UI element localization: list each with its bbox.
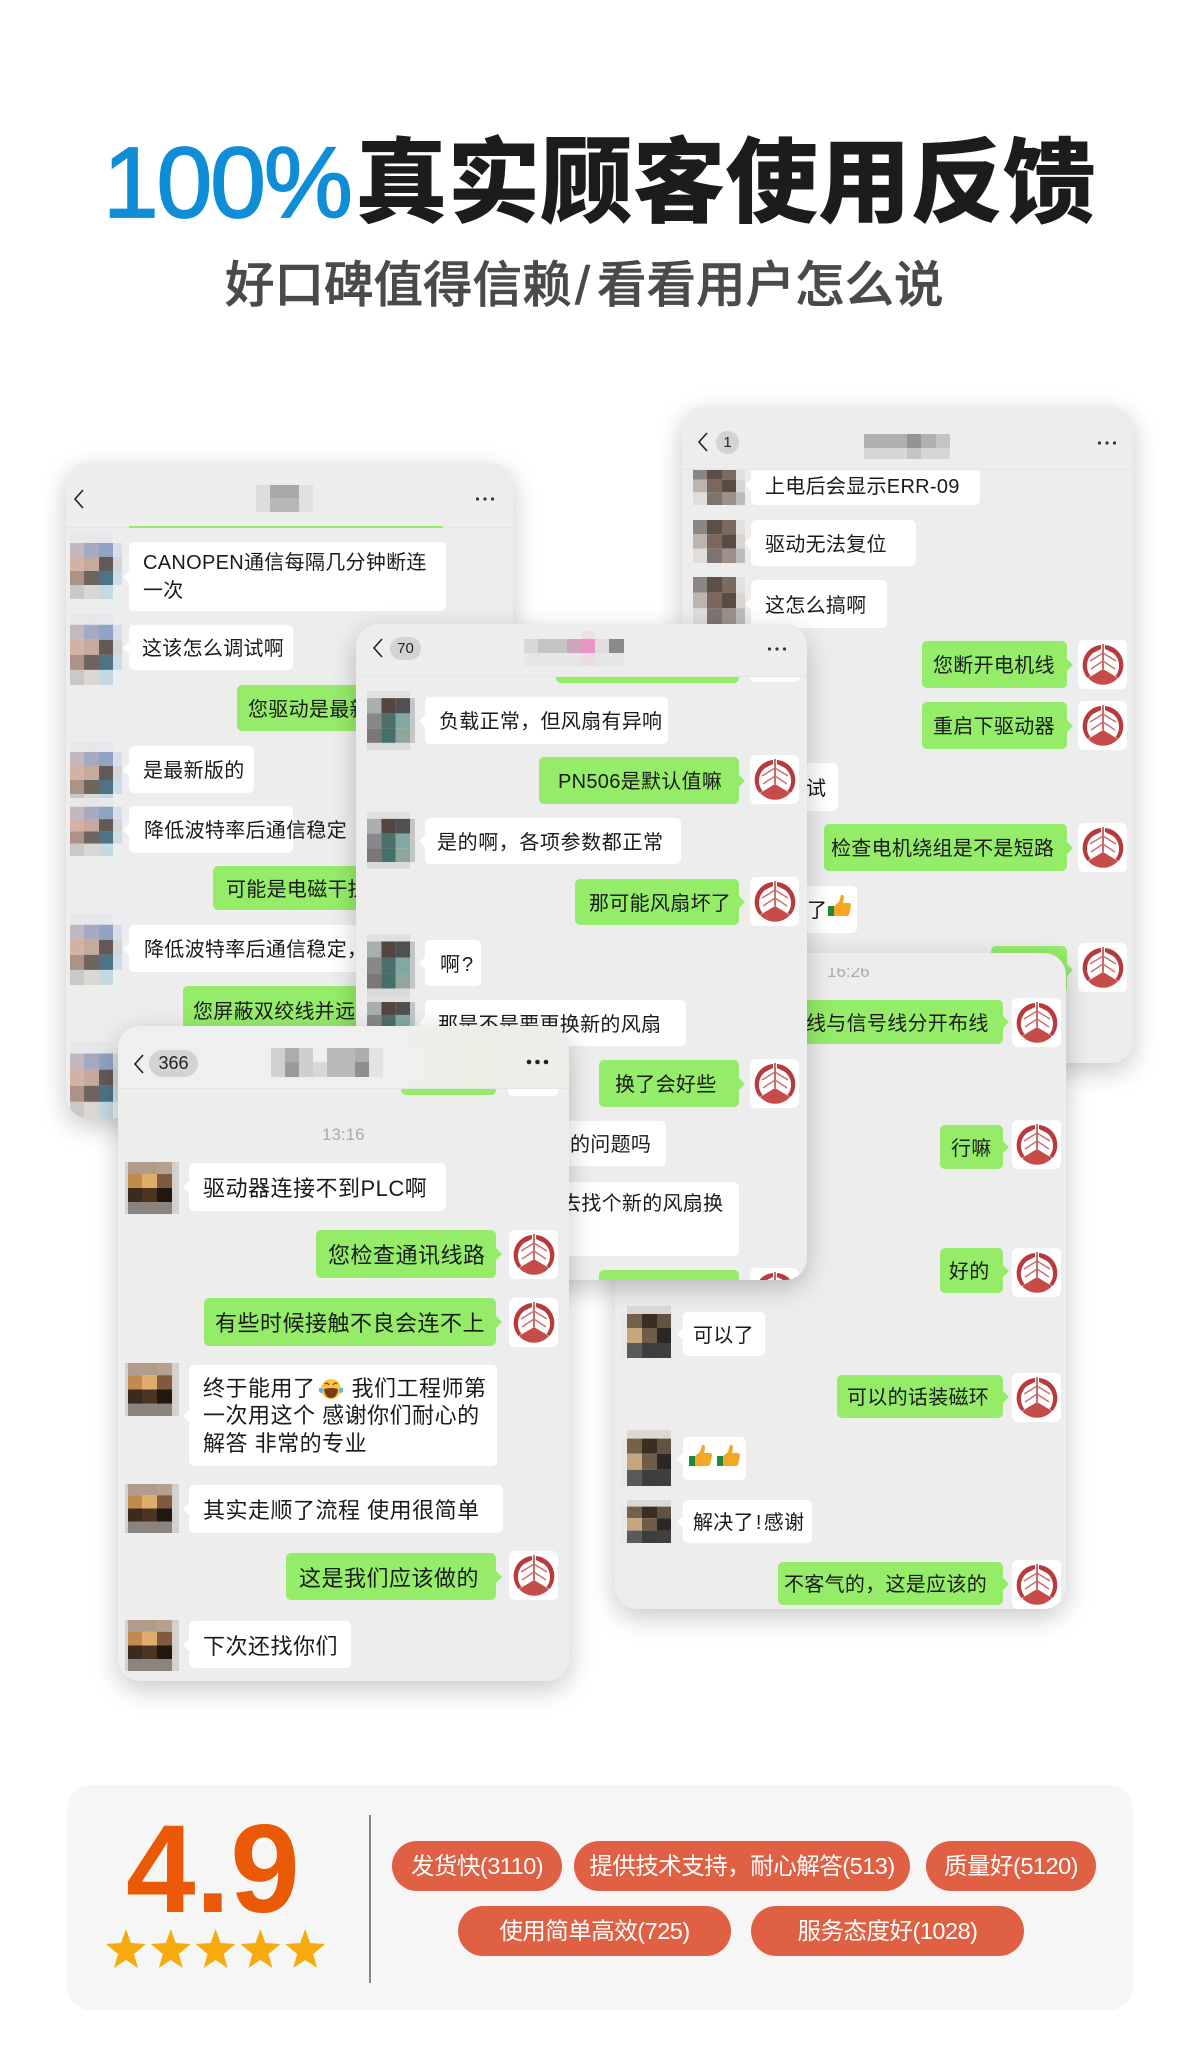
message: 这怎么搞啊: [765, 594, 866, 616]
logo avatar: [750, 755, 799, 804]
message: 降低波特率后通信稳定，: [144, 938, 367, 960]
message: multi-line thanks: 解答 非常的专业: [203, 1431, 367, 1456]
message: 是最新版的: [143, 760, 244, 782]
message: multi-line thanks: 一次用这个 感谢你们耐心的: [203, 1403, 480, 1428]
logo avatar: [509, 1230, 558, 1279]
tag pill: 提供技术支持，耐心解答(513): [589, 1853, 895, 1879]
reply: [778, 1562, 1003, 1605]
message: [129, 806, 293, 853]
reply: 可以的话装磁环: [847, 1386, 989, 1408]
message: 其实走顺了流程 使用很简单: [203, 1498, 480, 1522]
tag pill: 质量好(5120): [944, 1853, 1078, 1879]
avatar: [627, 1500, 671, 1543]
avatar: [125, 1363, 179, 1416]
panel: chat screenshot wiring: [615, 953, 1066, 1609]
reply: 您驱动是最新: [248, 698, 370, 720]
tag pill: [392, 1841, 562, 1891]
back arrow: [698, 432, 708, 452]
message: 那是不是要更换新的风扇: [438, 1014, 661, 1036]
reply: 有些时候接触不良会连不上: [215, 1310, 485, 1336]
message: multi-line thanks: 终于能用了 我们工程师第: [203, 1376, 487, 1401]
blurred name: [524, 631, 624, 666]
reply: [204, 1298, 496, 1346]
reply: 行嘛: [951, 1138, 992, 1160]
logo avatar: [1012, 1373, 1061, 1422]
back arrow: [372, 637, 384, 659]
reply: [940, 1125, 1003, 1169]
back arrow: [133, 1053, 145, 1075]
reply: 换了会好些: [615, 1074, 716, 1096]
message: [683, 1500, 812, 1543]
avatar: [693, 520, 745, 563]
avatar: [125, 1620, 179, 1671]
tag pill: [574, 1841, 910, 1891]
message: [425, 1121, 666, 1166]
reply: [760, 1000, 1003, 1044]
logo avatar: [509, 1298, 558, 1347]
subtitle: 好口碑值得信赖: [225, 258, 572, 313]
menu dots: [767, 646, 787, 652]
blurred name: [271, 1048, 418, 1077]
rating score: 4.9: [126, 1800, 300, 1939]
blurred name: [256, 485, 313, 512]
reply: [940, 1248, 1003, 1293]
menu dots: [526, 1059, 549, 1065]
panel: chat screenshot fan: [356, 624, 807, 1280]
message: [425, 1182, 739, 1256]
avatar: [125, 1484, 179, 1533]
message: 驱动器连接不到PLC啊: [203, 1176, 427, 1200]
clipped message: [750, 677, 800, 682]
tag pill: 使用简单高效(725): [499, 1918, 690, 1944]
message: [425, 940, 481, 986]
message: CANOPEN: [129, 542, 446, 611]
reply: 您检查通讯线路: [328, 1242, 486, 1268]
message: [189, 1163, 446, 1211]
avatar: [627, 1306, 671, 1358]
avatar: [70, 1054, 118, 1118]
tag pill: 服务态度好(1028): [798, 1918, 977, 1944]
reply: [183, 986, 443, 1034]
logo avatar: [1078, 943, 1127, 992]
back arrow: [74, 490, 84, 508]
reply: [286, 1553, 496, 1600]
logo avatar: [1078, 823, 1127, 872]
chat header: [356, 624, 807, 677]
logo avatar: [750, 877, 799, 926]
message: 这该怎么调试啊: [142, 638, 284, 660]
message: 去找个新的风扇换: [561, 1193, 723, 1215]
blurred name: [864, 434, 950, 459]
subtitle: 看看用户怎么说: [597, 258, 944, 313]
message: [129, 625, 293, 670]
reply: 那可能风扇坏了: [589, 892, 731, 914]
unread badge: [390, 637, 421, 660]
logo avatar: [1012, 1560, 1061, 1609]
tag pill: 发货快(3110): [411, 1853, 543, 1879]
message: [189, 1621, 351, 1668]
reply: [213, 866, 443, 910]
clipped reply: [129, 526, 443, 528]
reply: 线与信号线分开布线: [806, 1012, 989, 1034]
subtitle: [225, 256, 944, 316]
message: 驱动无法复位: [765, 534, 887, 556]
logo avatar: [509, 1551, 558, 1600]
avatar: [367, 812, 415, 869]
reply: [922, 641, 1067, 688]
avatar: [70, 624, 122, 685]
subtitle: /: [575, 256, 590, 316]
message: 解决了!感谢: [693, 1512, 804, 1534]
message: [751, 465, 980, 505]
clipped reply: [401, 1089, 496, 1095]
title accent: 100%: 100%: [103, 127, 351, 239]
avatar: [693, 577, 745, 624]
icon: thumbs up: [717, 1444, 740, 1466]
logo avatar: [1012, 1120, 1061, 1169]
message: 下次还找你们: [203, 1634, 338, 1658]
reply: PN506是默认值嘛: [558, 770, 722, 792]
avatar: [70, 924, 122, 985]
message: [425, 818, 681, 864]
avatar: [70, 543, 122, 599]
reply: 您屏蔽双绞线并远: [193, 1000, 355, 1022]
message: [425, 1000, 686, 1046]
reply: 您断开电机线: [933, 654, 1055, 676]
menu dots: [476, 497, 494, 501]
message: CANOPEN: CANOPEN通信每隔几分钟断连: [143, 552, 427, 574]
reply: 可能是电磁干扰: [226, 878, 368, 900]
logo avatar: [1012, 1248, 1061, 1297]
tag pill: [751, 1906, 1024, 1956]
message: multi-line thanks: [189, 1365, 497, 1466]
chat header: [682, 407, 1133, 470]
message: 啊?: [440, 954, 475, 976]
unread badge: 366: [158, 1053, 189, 1073]
avatar: [70, 798, 122, 856]
icon: thumbs up: [689, 1444, 712, 1466]
reply: 重启下驱动器: [933, 716, 1055, 738]
message: [189, 1485, 503, 1533]
logo avatar: [1078, 640, 1127, 689]
message: CANOPEN: 一次: [143, 580, 184, 602]
avatar: [70, 752, 122, 807]
unread badge: 1: [723, 434, 732, 451]
message: [683, 1312, 765, 1356]
message: two thumbs up: [683, 1437, 746, 1480]
chat header: [66, 463, 517, 528]
message: [425, 697, 668, 744]
reply: [575, 879, 739, 925]
reply: [824, 824, 1067, 871]
panel: chat screenshot CANOPEN: [66, 463, 513, 1118]
message: [751, 763, 838, 811]
message: [129, 925, 429, 972]
message: [129, 746, 254, 793]
reply: 好的: [949, 1260, 990, 1282]
message with thumbs up: 了: [807, 900, 827, 922]
panel: rating summary: [67, 1785, 1133, 2010]
message: 可以了: [693, 1324, 754, 1346]
avatar: [367, 691, 415, 750]
reply: 检查电机绕组是不是短路: [831, 838, 1054, 860]
timestamp: 13:16: [322, 1125, 365, 1144]
reply: 这是我们应该做的: [299, 1566, 479, 1590]
message: [751, 520, 916, 566]
reply: [316, 1230, 496, 1278]
message: 负载正常，但风扇有异响: [439, 710, 662, 732]
title main text: 真实顾客使用反馈: [355, 131, 1096, 235]
tag pill: [458, 1906, 731, 1956]
reply: [599, 1060, 739, 1107]
reply: [599, 1270, 739, 1310]
clipped message: [508, 1089, 558, 1096]
logo avatar: [1078, 701, 1127, 750]
message: 的问题吗: [570, 1134, 651, 1156]
message: 试: [806, 778, 826, 800]
message: 是的啊，各项参数都正常: [437, 832, 664, 854]
avatar: [367, 934, 415, 996]
chat header: [118, 1026, 569, 1089]
message: 上电后会显示ERR-09: [765, 476, 960, 498]
avatar: [627, 1430, 671, 1486]
message: 降低波特率后通信稳定: [144, 820, 347, 842]
panel: chat screenshot ERR-09: [682, 407, 1133, 1063]
avatar: [693, 470, 745, 505]
logo avatar: [750, 1268, 799, 1280]
reply: [991, 946, 1067, 993]
logo avatar: [1012, 998, 1061, 1047]
avatar: [125, 1162, 179, 1214]
five stars: [106, 1929, 328, 1969]
unread badge: 70: [397, 640, 414, 657]
panel: chat screenshot PLC: [118, 1026, 569, 1681]
avatar: [367, 996, 415, 1026]
logo avatar: [750, 1059, 799, 1108]
tag pill: [926, 1841, 1096, 1891]
reply: [837, 1375, 1003, 1418]
unread badge: [716, 431, 739, 454]
message: [751, 580, 887, 628]
menu dots: [1098, 441, 1116, 445]
title: [103, 127, 1096, 239]
clipped reply: [556, 677, 739, 683]
reply: [922, 702, 1067, 749]
unread badge: [149, 1050, 198, 1077]
reply: [539, 757, 739, 804]
reply: 不客气的，这是应该的: [784, 1574, 987, 1596]
message with thumbs up: [751, 886, 857, 933]
reply: [237, 685, 443, 731]
